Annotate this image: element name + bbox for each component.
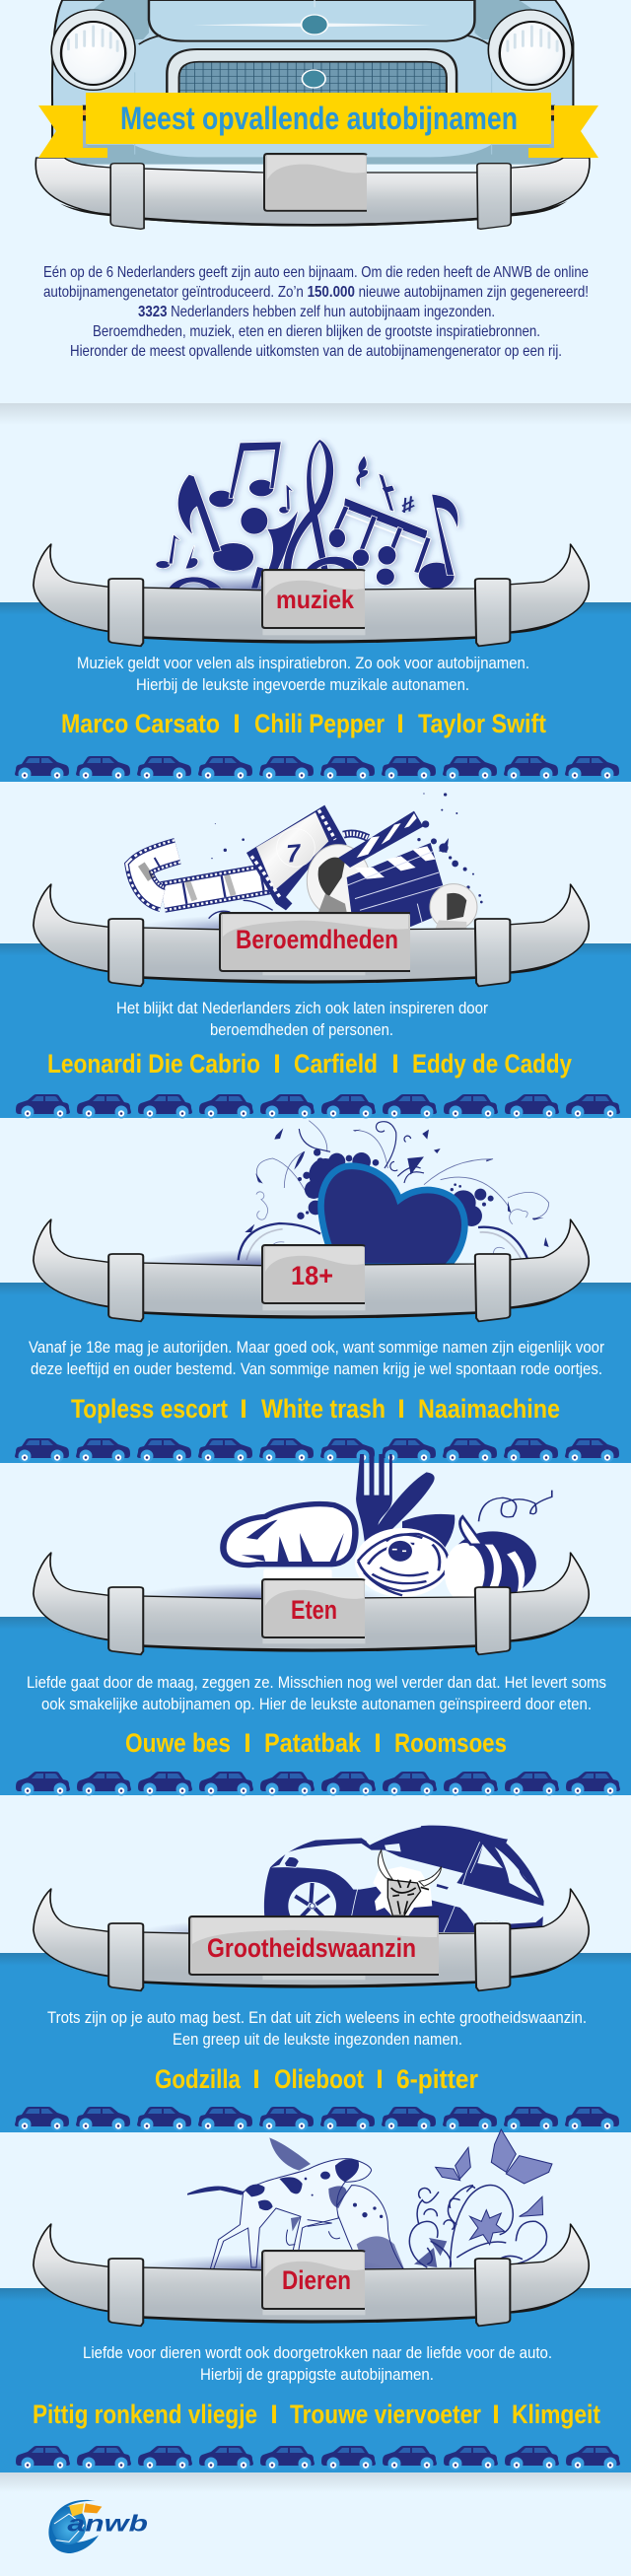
bumper [34,1553,589,1654]
car names [47,1049,572,1079]
car names [125,1728,507,1758]
description: Hierbij de leukste ingevoerde muzikale autonamen. [136,675,469,694]
license plate: Beroemdheden: Beroemdheden [236,925,398,954]
car names: Taylor Swift [418,709,546,738]
car names: I [270,2400,278,2429]
license plate: Beroemdheden [220,913,410,971]
license plate: Grootheidswaanzin: Grootheidswaanzin [207,1933,416,1963]
car names: Patatbak [264,1728,362,1758]
car names: Ouwe bes [125,1728,231,1758]
blue band [0,602,631,782]
blue band [0,1617,631,1795]
bumper [34,544,589,646]
bumper [34,884,589,986]
car names [155,2064,478,2094]
intro text [43,264,589,360]
car names: Godzilla [155,2064,242,2094]
description: Hierbij de grappigste autobijnamen. [200,2365,434,2384]
license plate: Dieren [262,2251,365,2309]
bumper [34,2224,589,2326]
pasta [355,1528,450,1597]
car names: Leonardi Die Cabrio [47,1049,260,1079]
car names: I [374,1728,382,1758]
intro text: 3323 Nederlanders hebben zelf hun autobijnaam ingezonden. [138,304,495,320]
row of cars [16,1772,620,1796]
illustration: food [223,1454,552,1602]
description: Een greep uit de leukste ingezonden namen. [173,2030,462,2049]
row of cars [15,2107,619,2131]
floral swirls [409,2186,547,2267]
section: beroemdheden [0,793,631,1118]
license plate: Eten: Eten [291,1595,337,1625]
illustration: heart with swirls [239,1121,549,1267]
butterflies [436,2129,552,2216]
car names: Naaimachine [418,1394,560,1424]
license plate: muziek: muziek [276,585,354,614]
row of cars [15,1438,619,1463]
pumpkin [445,1491,552,1602]
car names: Carfield [294,1049,378,1079]
license plate: 18+: 18+ [291,1261,333,1290]
car names: I [273,1049,281,1079]
row of cars [15,756,619,781]
row of cars [16,2446,620,2471]
illustration: film: 7 [285,840,304,869]
car names: Marco Carsato [61,709,220,738]
description [77,654,529,694]
logo: anwb [48,2500,148,2553]
car names: I [397,1394,405,1424]
illustration: music notes [156,440,457,589]
film reel [307,845,370,917]
description [27,1673,606,1713]
car names: Topless escort [71,1394,228,1424]
illustration: film [139,793,483,930]
blue band [0,1283,631,1463]
car names [33,2400,600,2429]
car names: Klimgeit [512,2400,600,2429]
header section [35,0,598,360]
film strip [139,834,368,900]
intro text: autobijnamengenetator geïntroduceerd. Zo’n 150.000 nieuwe autobijnamen zijn gegenereerd! [43,284,589,301]
license plate: muziek [262,570,365,628]
car names: I [252,2064,260,2094]
license plate: Dieren: Dieren [282,2265,351,2295]
section: muziek [0,440,631,782]
title: Meest opvallende autobijnamen [120,101,518,136]
logo ball [48,2500,102,2553]
car names [71,1394,560,1424]
description: Muziek geldt voor velen als inspiratiebron. Zo ook voor autobijnamen. [77,654,529,672]
car names: Trouwe viervoeter [290,2400,481,2429]
car names: I [240,1394,247,1424]
car names: I [376,2064,384,2094]
section: grootheidswaanzin [0,1824,631,2132]
car names: Olieboot [274,2064,364,2094]
license plate: Grootheidswaanzin [189,1916,439,1975]
grille [167,49,456,99]
description [29,1338,604,1378]
chef hat [223,1504,355,1585]
car names: Pittig ronkend vliegje [33,2400,257,2429]
dogs [210,2159,404,2270]
bumper [34,1219,589,1321]
blue band [0,2288,631,2472]
car names: I [233,709,241,738]
car names: I [244,1728,251,1758]
left headlight [51,10,135,90]
car names: White trash [261,1394,386,1424]
illustration: dogs and flowers [187,2129,552,2270]
description [116,999,488,1039]
bumper [35,158,590,229]
description: Liefde voor dieren wordt ook doorgetrokken naar de liefde voor de auto. [83,2343,552,2362]
illustration: classic car front [35,0,590,229]
second reel [430,884,477,930]
description [83,2343,552,2384]
blue band [0,943,631,1118]
car names: Roomsoes [394,1728,507,1758]
banner [38,93,598,158]
car names: Eddy de Caddy [412,1049,572,1079]
section: eten [0,1454,631,1796]
car names: I [391,1049,399,1079]
blue band [0,1953,631,2132]
description: beroemdheden of personen. [210,1020,393,1039]
illustration: car with bull [264,1824,544,1932]
license plate: 18+ [262,1245,365,1303]
description: Het blijkt dat Nederlanders zich ook laten inspireren door [116,999,488,1017]
right headlight [488,10,572,90]
car names: I [492,2400,500,2429]
car names: I [396,709,404,738]
intro text: Beroemdheden, muziek, eten en dieren blijken de grootste inspiratiebronnen. [93,323,540,340]
license plate [264,154,367,211]
clapperboard [338,811,451,927]
hood chrome and emblem [193,0,431,35]
car names: Chili Pepper [254,709,385,738]
logo: anwb: anwb [67,2510,148,2536]
description [47,2008,587,2049]
car names: 6-pitter [396,2064,478,2094]
section: 18+ [0,1121,631,1463]
row of cars [16,1094,620,1118]
car names [61,709,546,738]
bull head [373,1850,442,1916]
license plate: Eten [262,1579,365,1637]
bumper [34,1889,589,1990]
section: dieren [0,2129,631,2472]
